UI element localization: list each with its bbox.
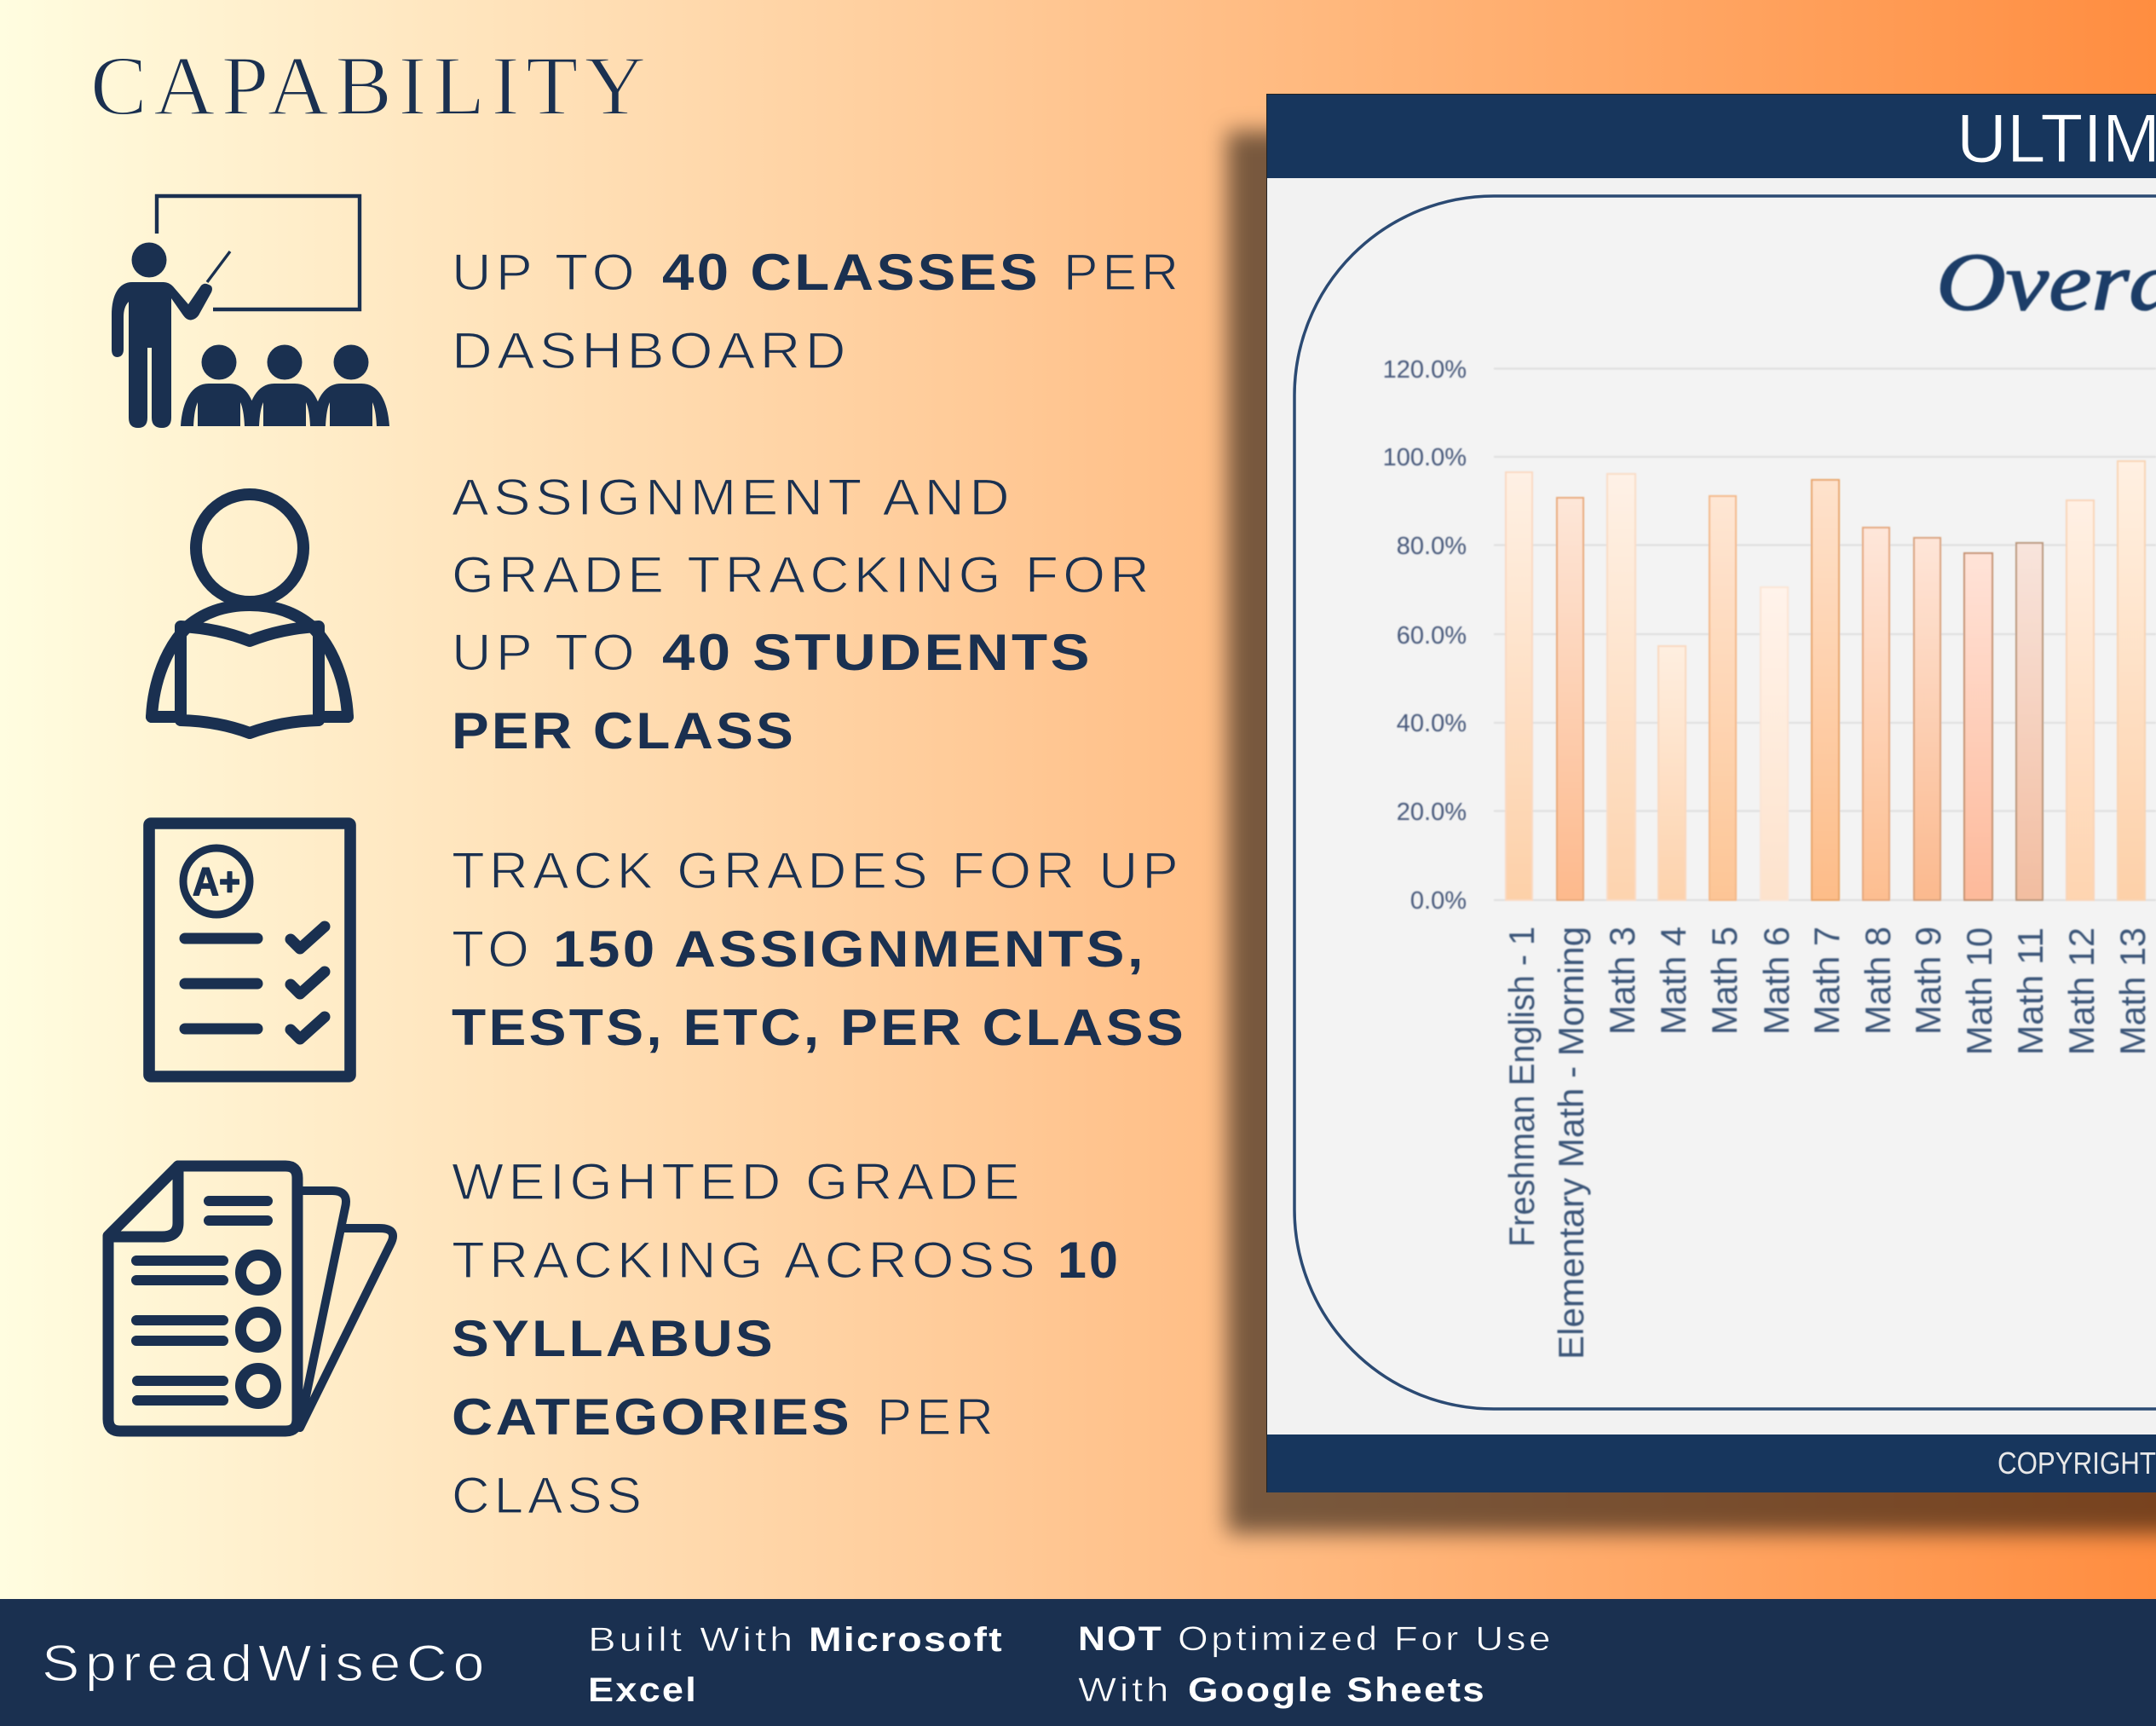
text: classes per dashboard: DASHBOARD	[452, 322, 850, 379]
note: not optimized for google sheets: With	[1078, 1671, 1172, 1709]
bars	[1506, 461, 2145, 900]
text: classes per dashboard	[452, 244, 1183, 379]
category labels: Math 10	[1959, 927, 1999, 1055]
note: not optimized for google sheets: Google Sheets	[1188, 1671, 1486, 1709]
category labels: Math 11	[2010, 927, 2050, 1055]
note: built with excel: Excel	[588, 1671, 698, 1709]
category labels: Math 13	[2113, 927, 2153, 1055]
text: track grades: TRACK GRADES FOR UP	[452, 842, 1183, 899]
icon: student reading a book	[152, 494, 348, 733]
rounded chart frame	[1294, 196, 2156, 1409]
text: weighted grade tracking	[452, 1153, 1121, 1524]
text: assignment and grade tracking	[452, 469, 1154, 759]
text: track grades: TESTS, ETC, PER CLASS	[452, 999, 1186, 1056]
y axis labels: 20.0%	[1397, 799, 1467, 826]
category labels: Math 7	[1807, 926, 1847, 1035]
text: classes per dashboard: PER	[1064, 244, 1183, 301]
category labels: Math 8	[1858, 926, 1898, 1035]
icon: graded checklist: A+	[193, 859, 240, 903]
note: not optimized for google sheets: NOT	[1078, 1620, 1163, 1658]
category labels: Elementary Math - Morning	[1551, 926, 1591, 1359]
text: assignment and grade tracking: 40 STUDENTS	[662, 624, 1092, 681]
text: track grades: TO	[452, 921, 533, 978]
category labels: Math 6	[1756, 926, 1796, 1035]
text: weighted grade tracking: TRACKING ACROSS	[452, 1232, 1040, 1289]
brand name: SpreadWiseCo	[42, 1635, 490, 1692]
text: weighted grade tracking: SYLLABUS	[452, 1310, 775, 1367]
dashboard screenshot shadow	[1227, 131, 2156, 1533]
footer band	[0, 1599, 2156, 1726]
text: weighted grade tracking: 10	[1058, 1232, 1121, 1289]
text: weighted grade tracking: WEIGHTED GRADE	[452, 1153, 1024, 1210]
y axis labels: 120.0%	[1383, 356, 1467, 384]
text: assignment and grade tracking: ASSIGNMENT AND	[452, 469, 1014, 526]
bar chart	[1383, 356, 2156, 1359]
category labels: Freshman English - 1	[1502, 926, 1542, 1247]
note: built with excel	[588, 1621, 1004, 1709]
text: weighted grade tracking: CATEGORIES	[452, 1388, 852, 1446]
note: not optimized for google sheets	[1078, 1620, 1554, 1709]
dashboard footer bar	[1267, 1434, 2156, 1492]
y axis labels: 60.0%	[1397, 622, 1467, 649]
y axis labels: 100.0%	[1383, 444, 1467, 471]
category labels	[1502, 926, 2153, 1359]
title: CAPABILITY	[90, 38, 646, 133]
text: weighted grade tracking: CLASS	[452, 1467, 646, 1524]
y axis labels	[1383, 356, 1467, 915]
text: weighted grade tracking: PER	[877, 1388, 998, 1446]
y axis labels: 40.0%	[1397, 710, 1467, 737]
note: not optimized for google sheets: Optimized For Use	[1178, 1620, 1554, 1658]
note: built with excel: Microsoft	[809, 1621, 1004, 1659]
text: track grades	[452, 842, 1186, 1056]
note: built with excel: Built With	[588, 1621, 796, 1659]
text: classes per dashboard: 40 CLASSES	[662, 244, 1041, 301]
y axis labels: 0.0%	[1410, 887, 1467, 915]
panel: dashboard screenshot	[1266, 94, 2156, 1492]
category labels: Math 3	[1602, 926, 1642, 1035]
text: assignment and grade tracking: GRADE TRACKING FOR	[452, 546, 1154, 603]
category labels: Math 5	[1704, 926, 1744, 1035]
text: assignment and grade tracking: PER CLASS	[452, 702, 796, 759]
category labels: Math 12	[2061, 927, 2101, 1055]
icon: teacher and students	[112, 196, 389, 428]
text: track grades: 150 ASSIGNMENTS,	[553, 921, 1146, 978]
dashboard header bar	[1267, 95, 2156, 178]
icon: graded checklist	[149, 823, 350, 1077]
text: assignment and grade tracking: UP TO	[452, 624, 639, 681]
y axis labels: 80.0%	[1397, 533, 1467, 560]
category labels: Math 9	[1908, 926, 1948, 1035]
icon: stacked documents	[108, 1166, 393, 1431]
text: classes per dashboard: UP TO	[452, 244, 639, 301]
category labels: Math 4	[1653, 926, 1693, 1035]
